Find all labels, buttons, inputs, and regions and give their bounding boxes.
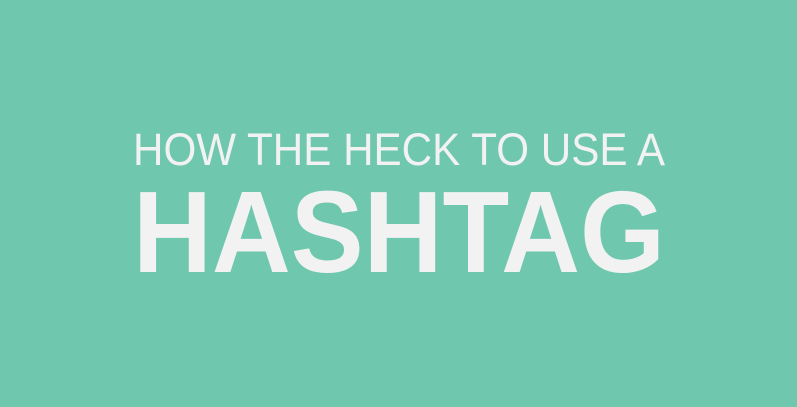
subtitle: how the heck to use a: HOW THE HECK TO USE A xyxy=(133,124,665,175)
title: hashtag: HASHTAG xyxy=(133,167,665,297)
